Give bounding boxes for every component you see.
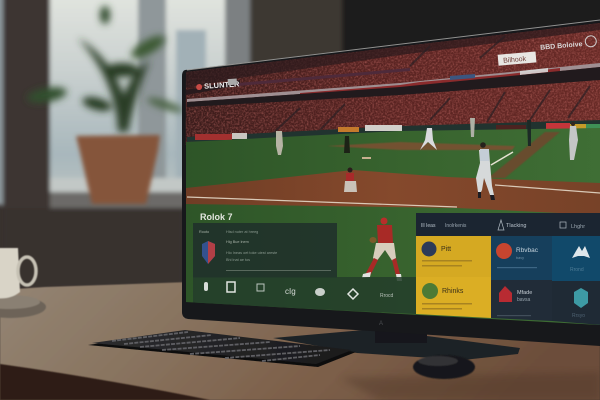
monitor logo: A bbox=[379, 321, 383, 327]
yellow card: Pitt: Pitt bbox=[441, 246, 451, 253]
monitor bezel bbox=[182, 19, 600, 346]
keyboard bbox=[88, 330, 356, 367]
dark card: Mfade bbox=[491, 280, 552, 321]
info overlay panel: Hio Ineas oet toke uiest areste bbox=[226, 251, 277, 255]
fielder in red, foreground bbox=[362, 218, 402, 281]
dark card: Mfade: Mfade bbox=[517, 290, 532, 296]
blue card: Rbvbac: Rbvbac bbox=[516, 247, 539, 254]
table bbox=[0, 282, 600, 400]
yellow card: Pitt bbox=[416, 236, 491, 277]
logo text: SLUNTER bbox=[204, 79, 240, 91]
key rows bbox=[112, 332, 330, 361]
info overlay panel: Rooto bbox=[199, 230, 209, 234]
baseball field bbox=[186, 128, 600, 330]
fielders bbox=[276, 131, 283, 155]
batter bbox=[476, 142, 495, 200]
heading: panel title: Rolok 7 bbox=[200, 212, 233, 222]
stream title bbox=[540, 35, 597, 52]
dark card: Mfade: bavsa bbox=[517, 297, 531, 303]
monitor screen: stadium broadcast bbox=[180, 15, 600, 330]
blue card: Rbvbac bbox=[491, 236, 552, 280]
ad boards bbox=[187, 120, 600, 142]
dashboard header row: Inolrkenis bbox=[445, 223, 467, 229]
stand aisles bbox=[270, 36, 590, 136]
monitor stand bbox=[273, 325, 520, 360]
dark card: hexagon badge: Rrsyo bbox=[572, 313, 585, 319]
stadium stands bbox=[180, 15, 600, 145]
coffee cup and saucer bbox=[0, 248, 46, 318]
plant leaves bbox=[26, 6, 184, 132]
icon: team shield bbox=[202, 241, 215, 264]
mouse bbox=[413, 355, 475, 379]
foul lines bbox=[187, 197, 457, 207]
dark card: hexagon badge bbox=[552, 281, 600, 325]
yellow card: Rhinks: Rhinks bbox=[442, 288, 464, 295]
info overlay panel: Bhi lnat ae tos bbox=[226, 258, 250, 262]
infield dirt bbox=[186, 170, 600, 215]
info overlay panel: Hisd nuter at hreeg bbox=[226, 230, 258, 234]
blue card: players icon: Rrond bbox=[570, 267, 584, 273]
info overlay panel: Hig Bue lnem bbox=[226, 240, 249, 244]
dashboard header row bbox=[416, 213, 600, 236]
stream title: BBD Boloive bbox=[540, 41, 583, 52]
dashboard header row: Tlacking bbox=[506, 223, 526, 229]
yellow card: Rhinks bbox=[416, 277, 491, 318]
dashboard header row: Ill Ieas bbox=[421, 223, 436, 229]
blue card: Rbvbac: bavy bbox=[516, 256, 524, 260]
toolbar icon glyphs: cIg bbox=[285, 287, 296, 296]
sponsor banner bbox=[498, 51, 536, 66]
sponsor banner: Bilhook bbox=[503, 56, 527, 65]
players on field bbox=[276, 118, 578, 200]
table front edge bbox=[0, 364, 210, 400]
dashboard panel bbox=[416, 213, 600, 325]
toolbar icon glyphs: Rrocd bbox=[380, 293, 394, 299]
toolbar icon glyphs bbox=[204, 282, 394, 299]
info overlay panel bbox=[193, 223, 337, 278]
outfield dirt stripe bbox=[327, 142, 515, 150]
scoreboard bands bbox=[238, 68, 410, 86]
catcher bbox=[344, 168, 357, 192]
potted plant bbox=[26, 6, 184, 204]
bottom icon toolbar bbox=[193, 277, 416, 314]
terracotta pot bbox=[76, 135, 160, 204]
blue card: players icon bbox=[552, 236, 600, 281]
dashboard header row: Lhghr bbox=[571, 224, 585, 230]
